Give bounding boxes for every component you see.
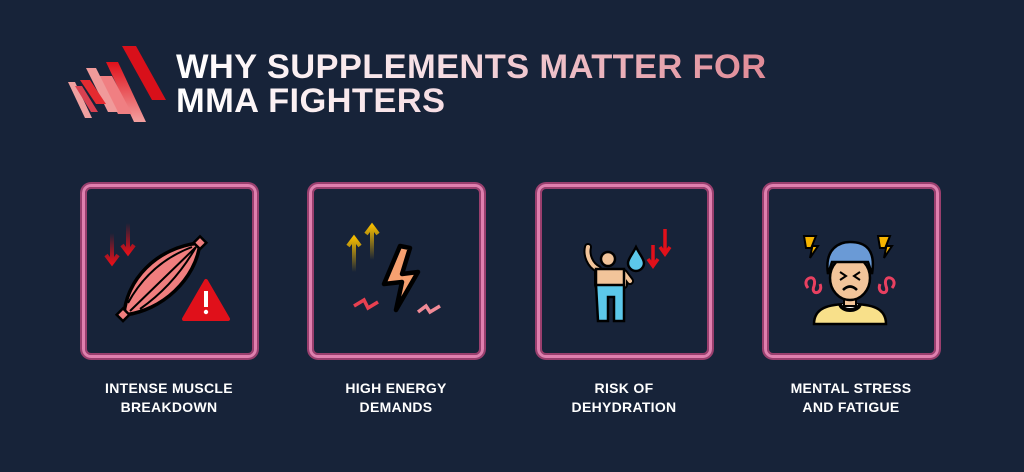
label: muscle (105, 380, 233, 415)
label: energy: HIGH ENERGY (345, 380, 447, 396)
icon: lightning bolt (346, 222, 441, 314)
label: muscle: BREAKDOWN (121, 399, 217, 415)
label: dehydration: DEHYDRATION (572, 399, 676, 415)
label: energy: DEMANDS (360, 399, 432, 415)
panel: energy (309, 184, 484, 358)
icon: stressed face (802, 235, 896, 326)
label: mental stress: AND FATIGUE (802, 399, 900, 415)
title (176, 50, 766, 118)
label: dehydration: RISK OF (595, 380, 653, 396)
panel: muscle breakdown (82, 184, 257, 358)
panel: mental stress (764, 184, 939, 358)
logo: red bars (68, 46, 166, 122)
label: dehydration (572, 380, 676, 415)
panel: dehydration (537, 184, 712, 358)
label: mental stress: MENTAL STRESS (791, 380, 911, 396)
label: mental stress (791, 380, 911, 415)
label: muscle: INTENSE MUSCLE (105, 380, 233, 396)
icon: person with water drop (584, 229, 672, 322)
icon: muscle with warning (104, 224, 230, 323)
title: MMA FIGHTERS (176, 82, 445, 120)
label: energy (345, 380, 447, 415)
title: WHY SUPPLEMENTS MATTER FOR (176, 48, 766, 86)
